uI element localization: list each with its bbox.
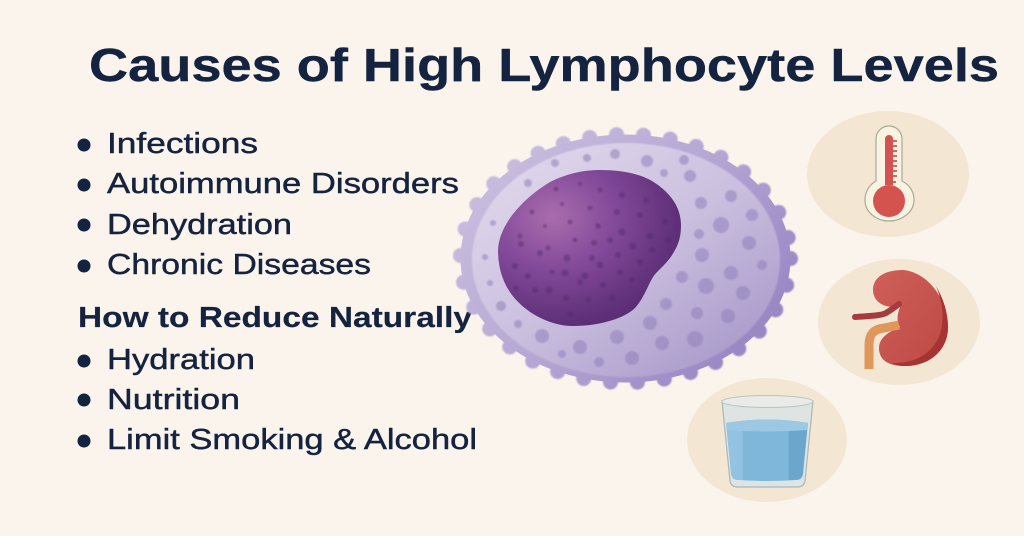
icon: glass of water	[687, 378, 847, 502]
list: causes	[78, 128, 459, 281]
illustration: lymphocyte cell	[460, 134, 790, 382]
icon: thermometer	[807, 111, 969, 237]
subheading: How to Reduce Naturally	[78, 302, 472, 334]
nucleus	[498, 170, 681, 326]
list: natural remedies: Hydration	[107, 344, 255, 376]
title: Causes of High Lymphocyte Levels	[89, 39, 999, 91]
list: causes: Chronic Diseases	[107, 249, 371, 281]
cytoplasm granules	[482, 149, 767, 367]
list: causes: Autoimmune Disorders	[107, 168, 459, 200]
list: natural remedies: Nutrition	[107, 384, 240, 416]
list: natural remedies: Limit Smoking & Alcohol	[107, 424, 477, 456]
list: natural remedies	[78, 344, 477, 456]
list: causes: Dehydration	[107, 209, 292, 241]
icon: kidney	[818, 259, 980, 385]
list: causes: Infections	[107, 128, 258, 160]
